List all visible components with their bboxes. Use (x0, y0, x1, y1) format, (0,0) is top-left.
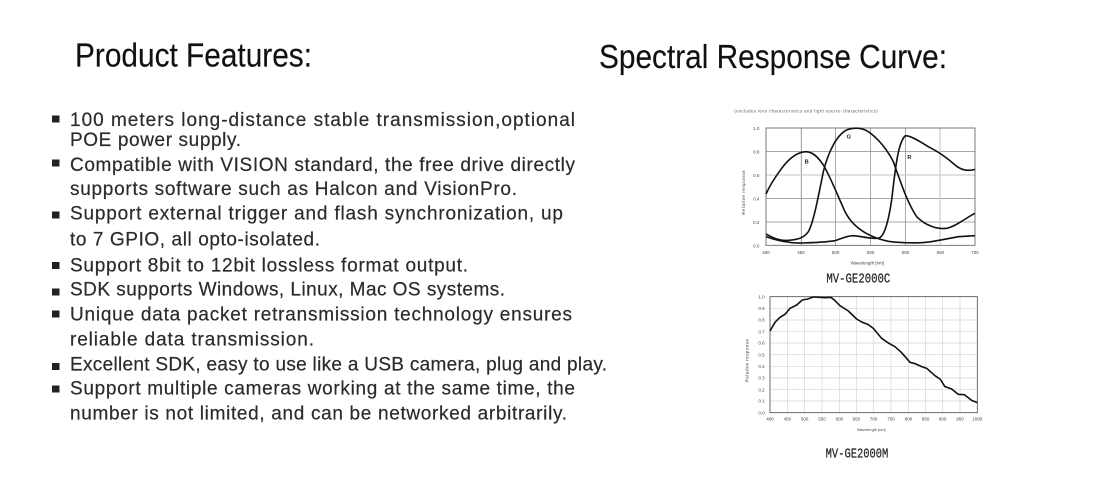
x axis labels: 950 (956, 417, 964, 422)
y axis labels: 0.6 (753, 173, 760, 178)
y axis labels: 1.0 (758, 294, 765, 299)
y axis labels: 0.9 (758, 306, 765, 311)
curve labels: G (847, 134, 852, 140)
curve labels: B (805, 160, 809, 166)
x axis labels: 600 (902, 250, 910, 255)
x axis labels: 600 (836, 417, 844, 422)
x axis labels: 650 (937, 250, 945, 255)
x axis labels: 550 (867, 250, 875, 255)
x axis labels (762, 250, 979, 265)
y axis labels: 0.4 (753, 196, 760, 201)
x axis labels: 450 (797, 250, 805, 255)
curve: mono response (770, 297, 977, 403)
y axis labels: 0.7 (758, 329, 765, 334)
y axis labels: 0.1 (758, 399, 765, 404)
y axis labels: 0.0 (753, 243, 760, 248)
y axis labels (741, 126, 760, 248)
feature: VISION standard: supports software such as Halcon and VisionPro. (70, 179, 517, 200)
x axis labels: 1000 (972, 417, 983, 422)
x axis labels: Wavelength (nm) (857, 428, 887, 432)
feature: external trigger: to 7 GPIO, all opto-isolated. (70, 230, 320, 250)
x axis labels: 450 (784, 417, 792, 422)
curve: green channel (766, 128, 975, 240)
model label: MV-GE2000C (826, 273, 890, 288)
curve labels (805, 134, 911, 166)
curve labels: R (907, 155, 911, 161)
y axis labels: 0.0 (758, 410, 765, 415)
x axis labels: 700 (870, 417, 878, 422)
x axis labels: 900 (939, 417, 947, 422)
x axis labels: 650 (853, 417, 861, 422)
feature: packet retransmission (52, 304, 572, 350)
chart: MV-GE2000C spectral response (734, 108, 979, 288)
feature: external trigger (52, 204, 563, 250)
x axis labels: 800 (905, 417, 913, 422)
x axis labels: Wavelength [nm] (851, 260, 884, 265)
x axis labels: 700 (971, 250, 979, 255)
feature: SDK systems: SDK supports Windows, Linux, Mac OS systems. (70, 280, 505, 300)
feature: lossless format: Support 8bit to 12bit lossless format output. (70, 256, 468, 276)
x axis labels: 400 (766, 417, 774, 422)
x axis labels: 500 (801, 417, 809, 422)
feature: multiple cameras (52, 378, 575, 424)
y axis labels: 0.6 (758, 341, 765, 346)
y axis labels: 0.8 (758, 318, 765, 323)
feature: long-distance transmission: 100 meters long-distance stable transmission,optional (70, 110, 575, 131)
x axis labels: 850 (922, 417, 930, 422)
feature: long-distance transmission: POE power supply. (70, 130, 241, 151)
y axis labels: 1.0 (753, 126, 760, 131)
chart: MV-GE2000M spectral response (744, 294, 983, 463)
x axis labels: 750 (887, 417, 895, 422)
feature: external trigger: Support external trigger and flash synchronization, up (70, 204, 563, 224)
feature: packet retransmission: reliable data transmission. (70, 330, 314, 350)
feature: VISION standard (52, 155, 576, 200)
x axis labels: 550 (818, 417, 826, 422)
curve: blue channel (766, 152, 975, 243)
y axis labels: 0.2 (753, 220, 760, 225)
y axis labels: 0.4 (758, 364, 765, 369)
y axis labels: 0.2 (758, 387, 765, 392)
model label: MV-GE2000M (826, 448, 888, 463)
x axis labels: 400 (762, 250, 770, 255)
title: product features: Product Features: (75, 36, 312, 74)
feature: long-distance transmission (52, 110, 575, 151)
y axis labels: Relative response (741, 170, 746, 215)
y axis labels: 0.8 (753, 149, 760, 154)
feature list (52, 110, 607, 424)
x axis labels (766, 417, 983, 432)
chart: MV-GE2000C spectral response: (excludes lens characteristics and light source characteristics) (734, 108, 878, 113)
feature: multiple cameras: number is not limited, and can be networked arbitrarily. (70, 404, 567, 424)
curve: red channel (766, 136, 975, 243)
feature: multiple cameras: Support multiple cameras working at the same time, the (70, 378, 575, 400)
feature: easy SDK: Excellent SDK, easy to use like a USB camera, plug and play. (70, 354, 607, 376)
feature: packet retransmission: Unique data packet retransmission technology ensures (70, 304, 572, 326)
x axis labels: 500 (832, 250, 840, 255)
title: spectral response curve: Spectral Response Curve: (599, 38, 947, 75)
y axis labels: 0.5 (758, 352, 765, 357)
y axis labels: Relative response (744, 338, 749, 382)
y axis labels: 0.3 (758, 376, 765, 381)
y axis labels (744, 294, 765, 415)
feature: VISION standard: Compatible with VISION standard, the free drive directly (70, 155, 576, 176)
